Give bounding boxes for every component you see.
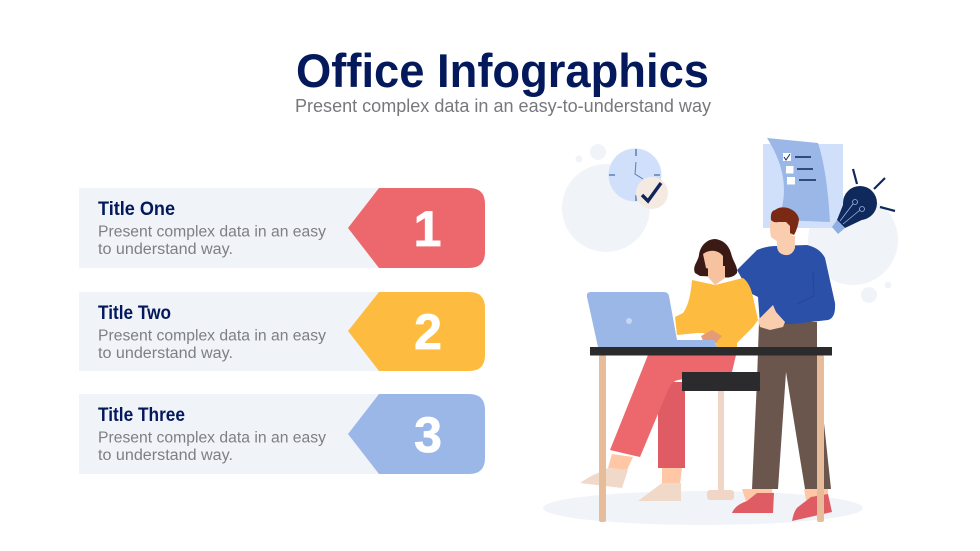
heading: title two: Title Two [98,303,171,324]
arrow tag: yellow [348,292,485,371]
icon: checklist document [763,138,843,228]
background circles [543,144,898,525]
text: description two: Present complex data in an easy [98,328,326,344]
man [732,207,835,521]
laptop [587,292,717,347]
title: Office Infographics [296,44,709,97]
woman [580,239,758,501]
panel: item three [79,394,485,474]
text: description two: to understand way. [98,345,233,362]
illustration: office scene [543,138,898,525]
desk [590,347,832,522]
text: description one: Present complex data in an easy [98,224,326,240]
number 3: 3 [414,407,442,463]
subtitle: Present complex data in an easy-to-understand way [295,96,711,116]
text: description three: to understand way. [98,447,233,464]
arrow tag: red [348,188,485,268]
man's hand [758,305,785,330]
arrow tag: blue [348,394,485,474]
text: description three: Present complex data in an easy [98,430,326,446]
panel: item two [79,292,485,371]
icon: clock with check [608,148,668,209]
text: description one: to understand way. [98,241,233,258]
number 2: 2 [414,304,442,360]
panel: item one [79,188,485,268]
stool [707,391,734,500]
heading: title three: Title Three [98,405,185,426]
number 1: 1 [414,201,441,257]
heading: title one: Title One [98,199,175,220]
icon: light bulb [832,169,895,234]
